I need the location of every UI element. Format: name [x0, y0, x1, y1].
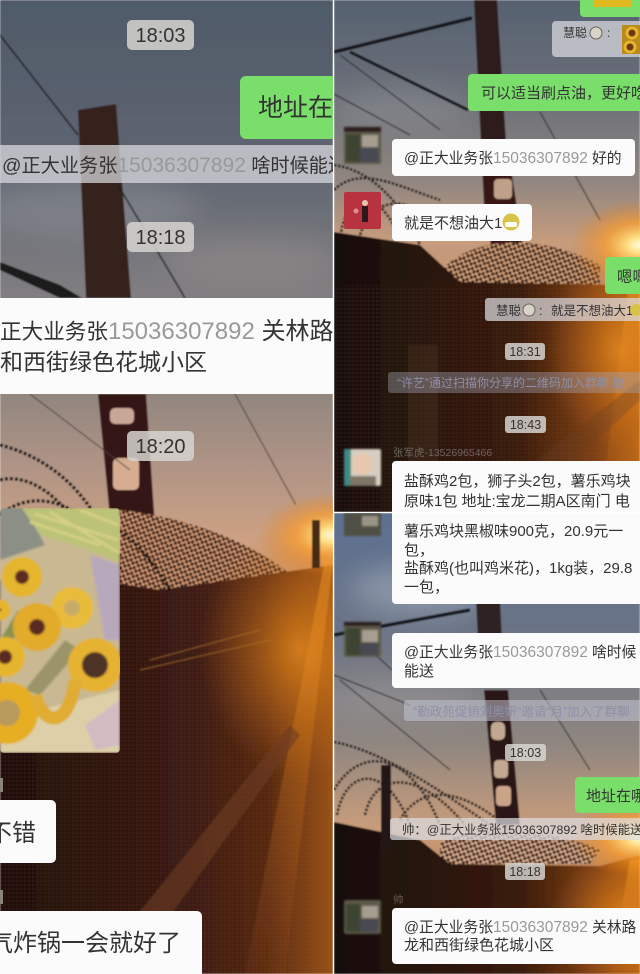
- white bubble: delivery address: @正大业务张15036307892 关林路: [404, 919, 637, 936]
- quoted image message: 慧聪: [563, 25, 587, 40]
- green bubble: address question: 地址在哪: [258, 94, 358, 122]
- white bubble: product prices: 一包，: [404, 579, 449, 596]
- white bubble: product prices: 薯乐鸡块黑椒味900克，20.9元一: [404, 523, 623, 540]
- white bubble: product prices: 盐酥鸡(也叫鸡米花)，1kg装，29.8: [404, 560, 632, 577]
- green bubble: 嗯嗯: [605, 257, 640, 294]
- timestamp 18:18: 18:18: [509, 865, 541, 879]
- white bubble: order: [392, 461, 640, 512]
- avatar: street scene cropped: [344, 513, 381, 536]
- quoted message bar: 慧聪: [496, 303, 522, 318]
- timestamp 18:03: 18:03: [510, 746, 541, 760]
- panel: right top screenshot: [330, 0, 640, 521]
- photo: fried onion rings: [0, 508, 120, 753]
- white bubble: delivery address: 龙和西街绿色花城小区: [404, 937, 554, 954]
- small avatar fragment: [0, 890, 3, 904]
- white bubble: delivery address: [0, 298, 350, 394]
- white bubble: product prices: 包，: [404, 542, 434, 559]
- timestamp 18:20: 18:20: [135, 436, 186, 458]
- green bubble: brush oil: [468, 74, 640, 111]
- avatar: red card: [344, 192, 381, 229]
- quoted message bar: [485, 298, 640, 321]
- timestamp 18:18: [127, 222, 194, 252]
- white bubble: when delivered: @正大业务张15036307892 啥时候: [404, 644, 637, 661]
- small avatar fragment: [0, 778, 3, 792]
- background: sky, tower and sunset fence: [0, 0, 333, 974]
- white bubble: when delivered: 能送: [404, 663, 434, 680]
- sender name: 帅: [393, 893, 404, 906]
- avatar: street scene: [344, 127, 381, 164]
- timestamp 18:43: 18:43: [510, 418, 541, 432]
- white bubble: product prices: [392, 506, 640, 604]
- quoted message bar: 帅：@正大业务张15036307892 啥时候能送: [402, 822, 640, 837]
- quoted image message: [552, 21, 640, 57]
- avatar: baby: [344, 449, 381, 486]
- background: sky, tower and fence: [330, 0, 640, 512]
- white bubble: when delivered: [392, 633, 640, 688]
- white bubble: order: 盐酥鸡2包，狮子头2包，薯乐鸡块: [404, 473, 631, 490]
- quoted message bar: :: [539, 304, 542, 318]
- background: sky, tower and fence: [320, 513, 640, 974]
- white bubble: not greasy: [392, 204, 532, 241]
- timestamp 18:03: [505, 744, 546, 761]
- quoted message bar: [0, 145, 350, 183]
- panel: right bottom screenshot: [320, 506, 640, 974]
- system notice: invited to group: “勤政苑促销刘奥妍”邀请“月”加入了群聊: [413, 704, 630, 719]
- sender name: 张军虎-13526965466: [393, 447, 492, 459]
- green bubble: address question: [240, 76, 333, 139]
- quoted message bar: 就是不想油大1: [551, 303, 633, 318]
- white bubble: air fryer: [0, 911, 202, 974]
- green bubble: address question: [575, 777, 640, 813]
- timestamp 18:43: [505, 416, 546, 433]
- system notice: joined by QR code: [388, 372, 640, 393]
- white bubble: not greasy: 就是不想油大1: [404, 215, 502, 232]
- white bubble: delivery address: 和西街绿色花城小区: [0, 349, 207, 375]
- white bubble: delivery address: 正大业务张15036307892 关林路: [0, 318, 333, 345]
- timestamp 18:18: 18:18: [135, 227, 186, 249]
- white bubble: delivery address: [392, 908, 640, 964]
- white bubble: order: 原味1包 地址:宝龙二期A区南门 电: [404, 493, 630, 510]
- system notice: invited to group: [404, 700, 640, 721]
- timestamp 18:03: [127, 20, 194, 50]
- white bubble: ok: [392, 139, 635, 176]
- timestamp 18:03: 18:03: [135, 25, 186, 47]
- avatar: street scene: [344, 900, 381, 934]
- system notice: joined by QR code: “许艺”通过扫描你分享的二维码加入群聊 撤: [397, 375, 624, 390]
- timestamp 18:20: [127, 431, 194, 461]
- white bubble: 不错: [0, 800, 56, 863]
- timestamp 18:31: [505, 343, 545, 360]
- white bubble: ok: @正大业务张15036307892 好的: [404, 150, 622, 167]
- quoted image message: :: [607, 26, 610, 40]
- quoted message bar: @正大业务张15036307892 啥时候能送: [2, 154, 347, 177]
- panel: left screenshot: [0, 0, 333, 974]
- quoted message bar: [390, 818, 640, 840]
- timestamp 18:31: 18:31: [509, 345, 541, 359]
- green bubble with sticker: [580, 0, 640, 17]
- timestamp 18:18: [505, 863, 545, 880]
- avatar: street scene: [344, 622, 381, 657]
